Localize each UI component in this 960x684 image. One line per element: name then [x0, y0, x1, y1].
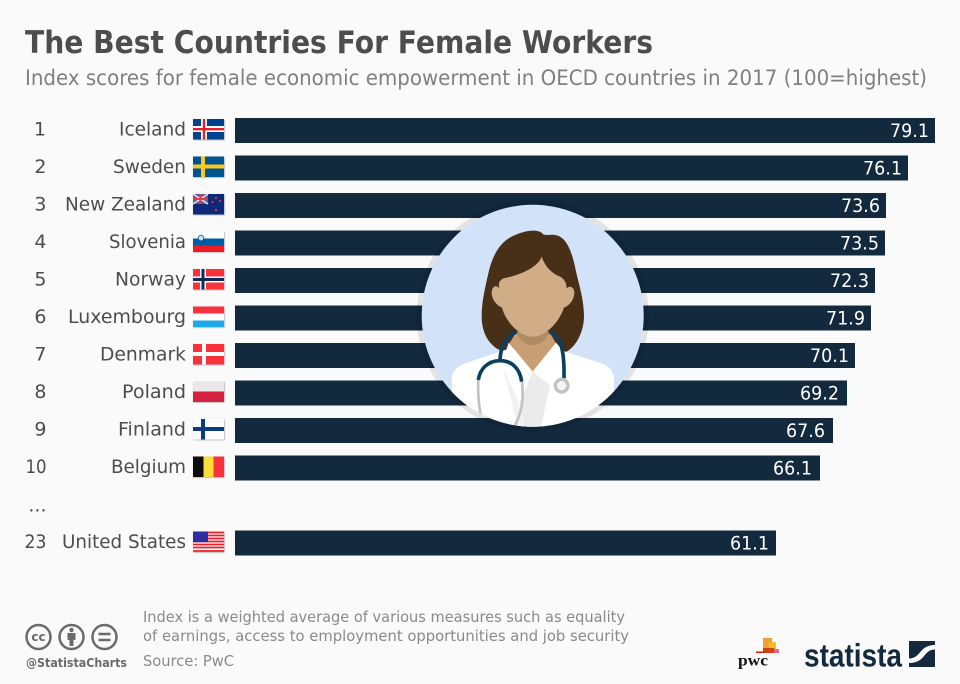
row: Denmark: 70.1	[810, 345, 849, 367]
row: Belgium: 10	[26, 456, 46, 478]
row: Norway: 72.3	[830, 270, 869, 292]
row: Luxembourg	[34, 306, 871, 330]
row: Belgium: Belgium	[111, 456, 186, 478]
row: Poland: 69.2	[800, 382, 839, 404]
footer note: Index is a weighted average of various measures such as equality	[143, 608, 625, 626]
row: Iceland	[34, 118, 935, 143]
illustration: female doctor portrait	[417, 200, 649, 435]
row: Iceland: 1	[34, 118, 46, 140]
row: Iceland: Iceland	[119, 118, 186, 140]
subtitle: Index scores for female economic empowerment in OECD countries in 2017 (100=highest)	[25, 66, 927, 90]
ellipsis: ...	[28, 494, 46, 516]
row: Belgium	[26, 456, 820, 480]
row: Denmark: Denmark	[100, 344, 186, 366]
face	[492, 257, 574, 337]
bar chart	[24, 118, 935, 556]
stethoscope	[478, 332, 522, 382]
row: Sweden: 2	[34, 156, 46, 178]
row: New Zealand: 3	[34, 194, 46, 216]
row: Slovenia: 73.5	[840, 232, 879, 254]
row: Poland: Poland	[122, 381, 186, 403]
row: Belgium: 66.1	[773, 457, 812, 479]
row: United States	[24, 530, 776, 556]
row: Norway: Norway	[115, 268, 186, 290]
title: The Best Countries For Female Workers	[25, 25, 653, 61]
row: Sweden	[34, 156, 908, 180]
row: Norway	[34, 268, 875, 293]
row: Finland: 9	[34, 418, 46, 440]
row: New Zealand: 73.6	[841, 195, 880, 217]
hair	[482, 231, 584, 352]
row: Luxembourg: 6	[34, 306, 46, 328]
row: Iceland: 79.1	[890, 120, 929, 142]
row: Poland: 8	[34, 381, 46, 403]
row: Finland: 67.6	[786, 420, 825, 442]
row: Slovenia: Slovenia	[109, 231, 186, 253]
row: Sweden: 76.1	[863, 157, 902, 179]
row: Sweden: Sweden	[113, 156, 186, 178]
footer note	[143, 608, 629, 670]
row: United States: 23	[24, 531, 46, 553]
shirt	[520, 372, 550, 428]
row: Slovenia	[34, 230, 885, 256]
icons: creative commons: cc	[31, 630, 46, 644]
logo: statista: statista	[804, 638, 902, 674]
logo: pwc: pwc	[738, 652, 768, 670]
coat	[452, 348, 614, 435]
row: Denmark	[34, 343, 855, 368]
row: Slovenia: 4	[34, 231, 46, 253]
row: New Zealand	[34, 193, 886, 218]
row: Finland: Finland	[118, 418, 186, 440]
row: United States: United States	[62, 531, 186, 553]
row: Norway: 5	[34, 268, 46, 290]
handle: @StatistaCharts	[26, 655, 127, 670]
icons: creative commons	[26, 625, 116, 649]
neck	[509, 332, 556, 372]
row: Poland	[34, 380, 847, 406]
footer note: Source: PwC	[143, 652, 234, 670]
row: Finland	[34, 418, 833, 443]
row: Denmark: 7	[34, 344, 46, 366]
row: Luxembourg: Luxembourg	[68, 306, 186, 328]
logo: pwc	[738, 638, 779, 670]
row: Luxembourg: 71.9	[826, 307, 865, 329]
row: New Zealand: New Zealand	[65, 194, 186, 216]
footer note: of earnings, access to employment opportunities and job security	[143, 627, 629, 645]
row: United States: 61.1	[730, 532, 769, 554]
